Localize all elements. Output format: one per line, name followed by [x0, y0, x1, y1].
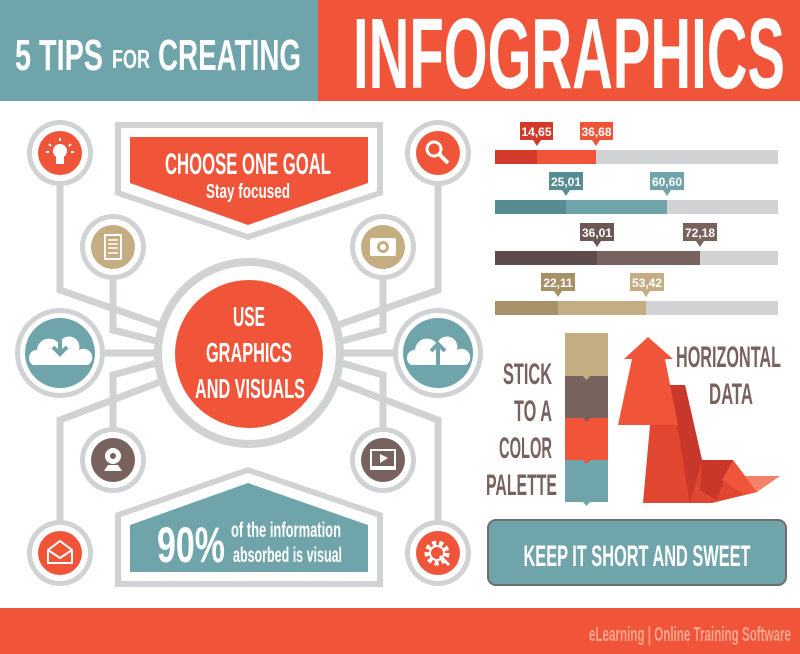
header: teal block: 5 TIPS	[15, 31, 103, 80]
icon: gear	[405, 520, 471, 586]
panel: choose one goal: Stay focused	[206, 181, 290, 203]
text: horizontal data: DATA	[709, 378, 753, 411]
text: stick to a color palette: STICK	[503, 358, 552, 391]
bar 4	[495, 273, 778, 315]
bar chart	[495, 122, 778, 315]
bar 4: 22,11	[543, 276, 573, 290]
icon: envelope	[27, 520, 93, 586]
connector lines	[60, 185, 438, 520]
bar 2	[495, 172, 778, 214]
icon: document	[80, 214, 146, 280]
panel: 90%: absorbed is visual	[233, 544, 342, 567]
icon: upload cloud	[393, 308, 483, 398]
text: horizontal data	[676, 341, 781, 411]
panel: choose one goal	[115, 122, 383, 240]
panel: center use graphics	[154, 258, 344, 448]
icon: camera	[350, 214, 416, 280]
bar 2: 60,60	[652, 175, 682, 189]
panel: 90%	[115, 467, 383, 587]
panel: center use graphics: AND VISUALS	[195, 373, 305, 404]
text: stick to a color palette: TO A	[514, 395, 552, 428]
text: stick to a color palette: COLOR	[499, 432, 552, 465]
text: stick to a color palette: PALETTE	[486, 469, 557, 502]
header: teal block: CREATING	[158, 31, 301, 80]
bar 1: 36,68	[581, 125, 612, 139]
bar 3	[495, 223, 778, 265]
header: teal block: FOR	[112, 44, 150, 74]
text: stick to a color palette	[486, 358, 557, 502]
icon: lightbulb	[27, 120, 93, 186]
panel: 90%: 90%	[157, 517, 225, 573]
palette column	[565, 333, 608, 506]
panel: center use graphics: USE	[233, 301, 265, 332]
icon: download cloud	[15, 308, 105, 398]
icon: webcam	[80, 427, 146, 493]
bar 1: 14,65	[521, 125, 552, 139]
panel: 90%: of the information	[231, 519, 341, 542]
bar 3: 36,01	[582, 226, 612, 240]
button: keep it short and sweet	[488, 520, 786, 585]
header: teal block	[0, 0, 318, 101]
arrow graphic	[618, 337, 780, 503]
icon: video	[350, 427, 416, 493]
bar 4: 53,42	[632, 276, 662, 290]
bar 2: 25,01	[551, 175, 581, 189]
bar 3: 72,18	[685, 226, 715, 240]
icon: search	[405, 120, 471, 186]
bar 1	[495, 122, 778, 164]
footer	[0, 608, 800, 654]
panel: choose one goal: CHOOSE ONE GOAL	[165, 148, 331, 181]
panel: center use graphics: GRAPHICS	[206, 337, 292, 368]
